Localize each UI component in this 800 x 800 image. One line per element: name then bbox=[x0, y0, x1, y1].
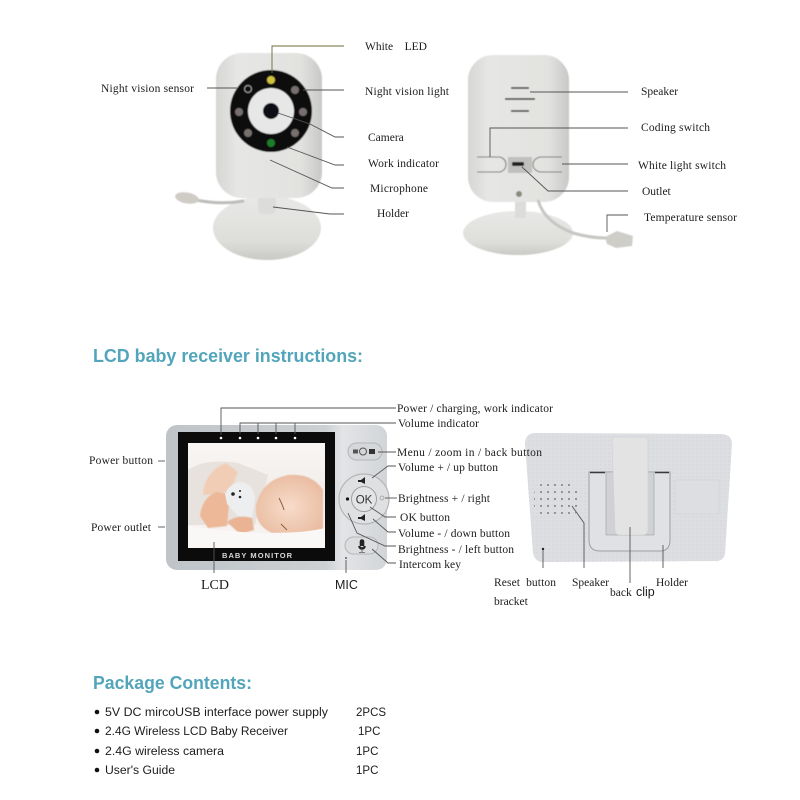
callout: White light switch: White light switch bbox=[638, 160, 726, 172]
callout: White LED bbox=[272, 41, 427, 73]
callout: Camera: Camera bbox=[368, 132, 404, 144]
work indicator LED bbox=[267, 139, 275, 147]
baby hand bbox=[227, 517, 254, 534]
rear camera illustration bbox=[463, 55, 633, 255]
white lens surround bbox=[248, 88, 294, 134]
callout: Work indicator: Work indicator bbox=[368, 158, 439, 170]
belt clip bbox=[612, 437, 648, 535]
rear camera callouts bbox=[490, 86, 737, 232]
volume down icon bbox=[358, 514, 365, 521]
callout: White LED: White LED bbox=[365, 41, 427, 53]
callout: Speaker: Speaker bbox=[641, 86, 678, 98]
screw bbox=[516, 191, 522, 197]
list item: receiver bbox=[95, 726, 380, 738]
left switch outline bbox=[477, 157, 506, 172]
callout: Intercom key bbox=[372, 549, 461, 571]
OK button: OK bbox=[356, 494, 373, 506]
night vision sensor bbox=[244, 86, 252, 92]
callout: Holder: Holder bbox=[377, 208, 409, 220]
right switch outline bbox=[533, 157, 562, 172]
holder top slots bbox=[590, 472, 669, 474]
callout: Power outlet: Power outlet bbox=[91, 522, 152, 534]
photo background bbox=[188, 443, 325, 548]
callout: Reset button: Reset button bbox=[494, 577, 556, 589]
list item: guide bbox=[95, 765, 378, 777]
callout: Temperature sensor: Temperature sensor bbox=[644, 212, 737, 224]
callout: Menu / zoom in / back button: Menu / zoom in / back button bbox=[397, 447, 542, 459]
callout: Brightness - / left button: Brightness - / left button bbox=[398, 544, 514, 556]
callout: back clip bbox=[610, 527, 655, 599]
callout: Holder bbox=[656, 545, 688, 589]
callout: Holder bbox=[273, 207, 409, 220]
callout: Intercom key: Intercom key bbox=[399, 559, 461, 571]
heading: LCD baby receiver instructions: LCD baby receiver instructions: bbox=[93, 346, 363, 366]
night vision LEDs bbox=[235, 86, 307, 137]
receiver rear body bbox=[525, 433, 732, 562]
camera base bbox=[213, 196, 321, 260]
receiver front callouts bbox=[89, 403, 553, 593]
temperature sensor plug bbox=[174, 190, 200, 206]
callout: Volume + / up button bbox=[372, 462, 498, 478]
list item: receiver: 1PC bbox=[358, 726, 380, 738]
callout: OK button: OK button bbox=[400, 512, 450, 524]
speaker grille bbox=[534, 483, 579, 517]
callout: Speaker: Speaker bbox=[572, 577, 609, 589]
sensor wire bbox=[538, 200, 606, 238]
teddy face bbox=[231, 490, 241, 498]
rear camera stem bbox=[515, 198, 526, 218]
callout: Volume indicator bbox=[240, 418, 479, 434]
bed sheet bbox=[188, 526, 325, 548]
rear camera base bbox=[463, 211, 573, 255]
callout: Coding switch: Coding switch bbox=[641, 122, 710, 134]
callout: Brightness + / right: Brightness + / right bbox=[398, 493, 491, 505]
upper arm bbox=[203, 463, 238, 495]
callout: Volume - / down button: Volume - / down button bbox=[398, 528, 510, 540]
black lens ring bbox=[230, 70, 312, 152]
callout: Power / charging, work indicator bbox=[221, 403, 553, 435]
list item: camera: 2.4G wireless camera bbox=[105, 746, 225, 758]
callout: Reset button bbox=[494, 550, 556, 589]
brightness minus icon bbox=[346, 497, 349, 501]
list item: power supply: 2PCS bbox=[356, 707, 386, 719]
callout: back clip: clip bbox=[636, 585, 655, 599]
callout: Night vision light: Night vision light bbox=[365, 86, 450, 98]
callout: LCD: LCD bbox=[201, 578, 229, 593]
directional pad bbox=[339, 474, 389, 524]
receiver rear callouts bbox=[494, 506, 688, 608]
receiver rear illustration bbox=[525, 433, 732, 562]
list item: guide: 1PC bbox=[356, 765, 378, 777]
callout: Temperature sensor bbox=[607, 212, 737, 232]
microphone icon bbox=[358, 540, 366, 552]
menu button bbox=[348, 443, 382, 460]
callout: Volume + / up button: Volume + / up button bbox=[398, 462, 498, 474]
callout: MIC: MIC bbox=[335, 578, 358, 592]
rear surface texture bbox=[525, 433, 732, 562]
list item: camera: 1PC bbox=[356, 746, 378, 758]
blanket and sleeve bbox=[188, 462, 268, 525]
callout: Speaker bbox=[572, 506, 609, 589]
black screen bezel bbox=[178, 432, 335, 561]
label recess bbox=[675, 480, 719, 514]
callout: Holder: Holder bbox=[656, 577, 688, 589]
callout: Coding switch bbox=[490, 122, 710, 157]
front camera callouts bbox=[101, 41, 450, 220]
teddy bear bbox=[225, 482, 255, 518]
holder bracket bbox=[589, 472, 670, 551]
callout: Power button: Power button bbox=[89, 455, 153, 467]
indicator LEDs bbox=[220, 437, 296, 439]
outlet slot bbox=[512, 162, 524, 166]
lens bbox=[263, 103, 279, 119]
brightness plus icon bbox=[380, 496, 384, 500]
baby fist bbox=[200, 492, 230, 528]
receiver body bbox=[166, 425, 387, 570]
camera stem bbox=[258, 196, 276, 214]
camera body bbox=[216, 53, 322, 198]
list item: guide: User's Guide bbox=[105, 765, 175, 777]
callout: LCD bbox=[201, 542, 229, 593]
callout: Power / charging, work indicator: Power / charging, work indicator bbox=[397, 403, 553, 415]
list item: camera bbox=[95, 746, 378, 758]
baby head bbox=[256, 475, 323, 533]
callout: Microphone bbox=[270, 160, 428, 195]
callout: Camera bbox=[278, 113, 404, 144]
OK button bbox=[352, 486, 376, 512]
callout: Volume indicator: Volume indicator bbox=[398, 418, 479, 430]
sensor plug bbox=[605, 231, 633, 248]
MIC hole bbox=[345, 557, 347, 559]
callout: Outlet bbox=[522, 167, 672, 198]
callout: Work indicator bbox=[287, 147, 439, 170]
callout: Brightness - / left button bbox=[348, 513, 514, 556]
baby photo bbox=[188, 443, 325, 548]
list item: receiver: 2.4G Wireless LCD Baby Receiver bbox=[105, 726, 288, 738]
white LED bbox=[267, 76, 275, 84]
list item: power supply: 5V DC mircoUSB interface power supply bbox=[105, 707, 328, 719]
intercom button bbox=[345, 537, 378, 554]
bracket label: bracket bbox=[494, 596, 529, 608]
callout: OK button bbox=[370, 507, 450, 524]
receiver front illustration bbox=[166, 425, 389, 570]
reset hole bbox=[542, 548, 544, 550]
volume up icon bbox=[358, 477, 365, 484]
callout: Outlet: Outlet bbox=[642, 186, 672, 198]
temperature sensor wire bbox=[196, 200, 244, 203]
rear camera body bbox=[468, 55, 569, 202]
front camera illustration bbox=[174, 53, 322, 260]
callout: back clip: back bbox=[610, 587, 632, 599]
holder inner channel bbox=[606, 472, 654, 535]
callout: Night vision sensor bbox=[101, 83, 237, 95]
outlet recess bbox=[508, 157, 532, 173]
package contents list bbox=[95, 707, 386, 777]
speaker slots bbox=[505, 88, 535, 111]
callout: MIC bbox=[335, 560, 358, 592]
callout: Night vision sensor: Night vision sensor bbox=[101, 83, 194, 95]
baby closed eye bbox=[279, 498, 287, 530]
BABY MONITOR label: BABY MONITOR bbox=[222, 551, 293, 560]
callout: Microphone: Microphone bbox=[370, 183, 428, 195]
callout: Volume - / down button bbox=[373, 519, 510, 540]
heading: Package Contents: Package Contents: bbox=[93, 673, 252, 693]
